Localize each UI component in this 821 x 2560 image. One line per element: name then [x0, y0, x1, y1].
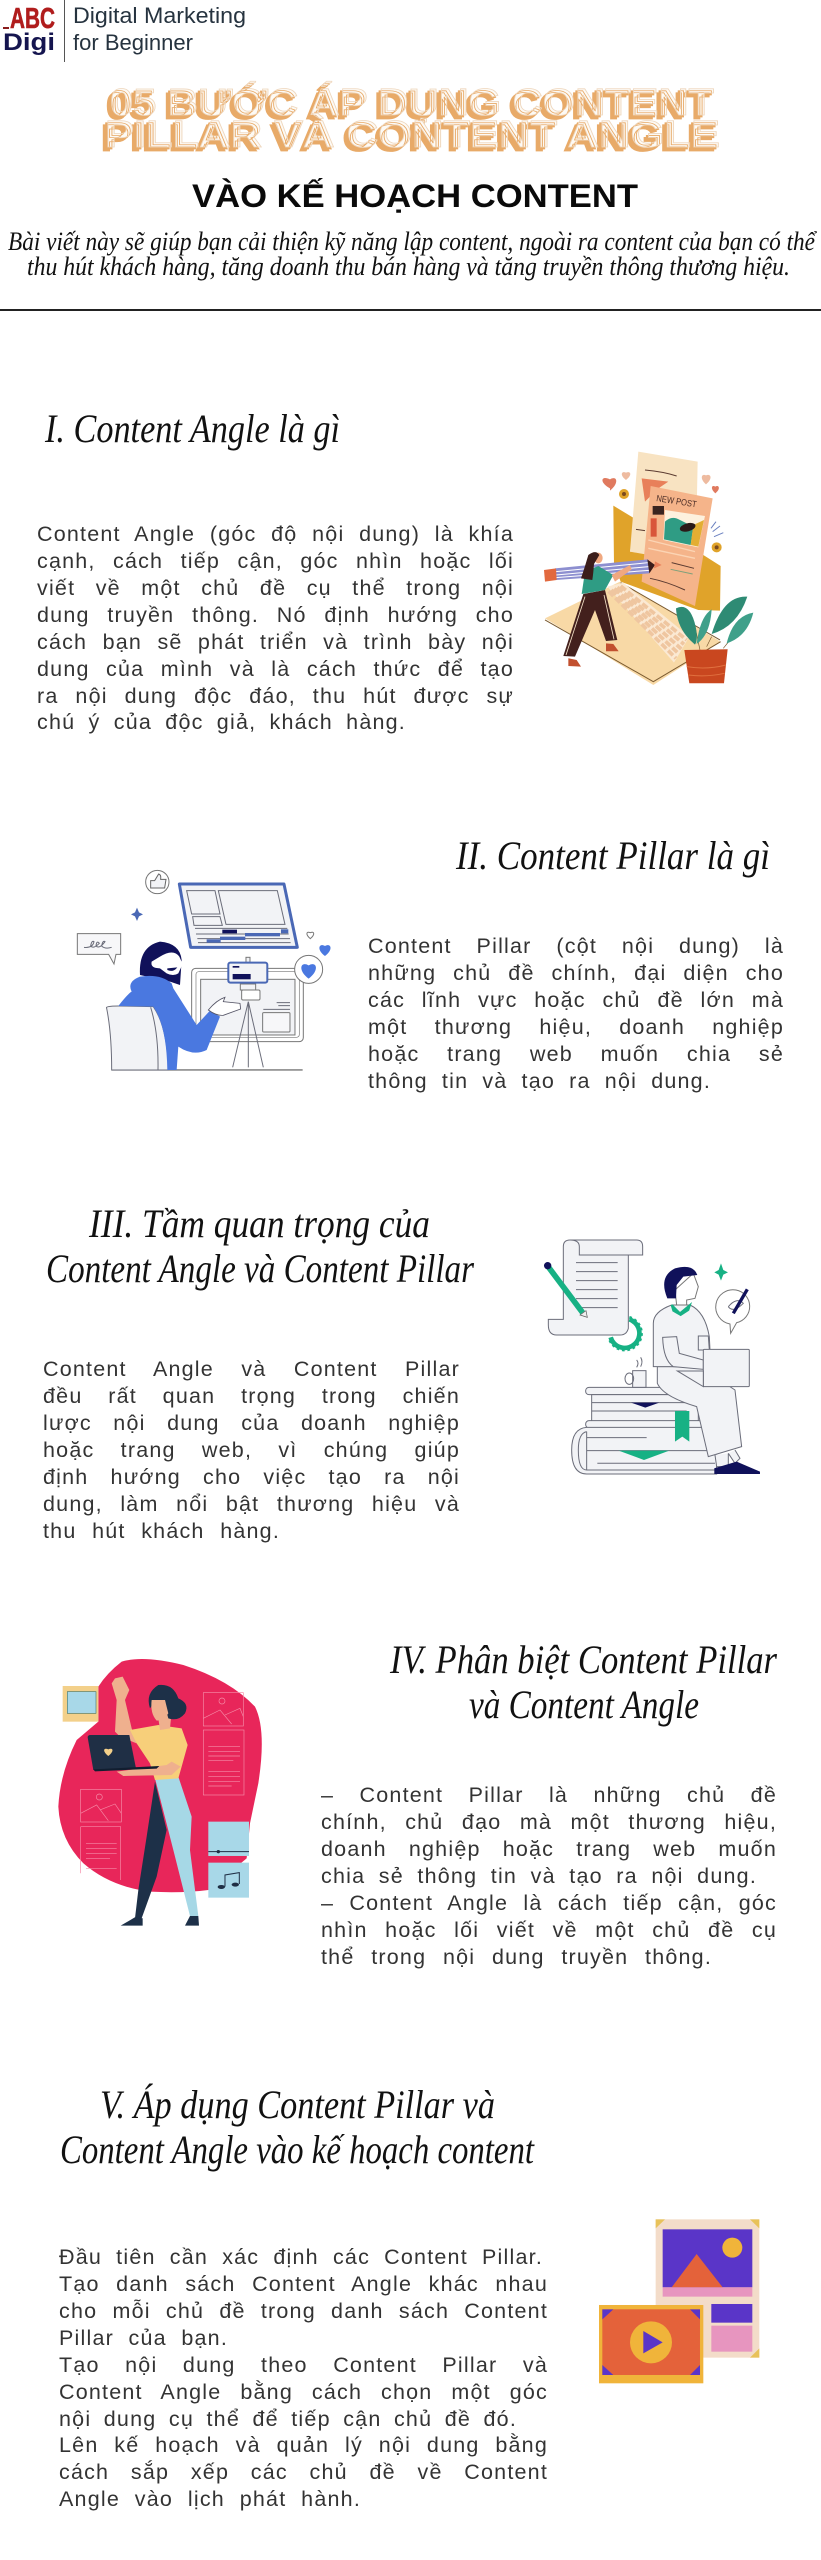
legs — [135, 1782, 167, 1918]
text block III: đều rất quan trọng trong chiến — [43, 1384, 460, 1408]
woman — [563, 590, 617, 657]
text block IV: – Content Pillar là những chủ đề — [321, 1783, 777, 1807]
text block V: cách sắp xếp các chủ đề về Content — [59, 2460, 548, 2484]
cup — [633, 1371, 646, 1387]
woman — [657, 1367, 742, 1457]
text block I: ra nội dung độc đáo, thu hút được sự — [37, 684, 514, 708]
books — [586, 1387, 699, 1395]
heading V: V. Áp dụng Content Pillar và — [100, 2082, 495, 2127]
text block III: hoặc trang web, vì chúng giúp — [43, 1438, 460, 1462]
tripod and phone — [233, 1002, 263, 1067]
text block V: Content Angle bằng cách chọn một góc — [59, 2380, 548, 2404]
text block V — [59, 2245, 548, 2511]
torso — [112, 1677, 137, 1743]
desk monitor — [192, 968, 303, 1042]
text block III: thu hút khách hàng. — [43, 1519, 280, 1543]
text block IV — [321, 1783, 777, 1969]
main title — [105, 80, 720, 156]
intro text — [8, 227, 817, 281]
laptop — [703, 1349, 749, 1387]
illustration: woman on books — [544, 1240, 760, 1474]
text block V: nội dung cụ thể để tiếp cận chủ đề đó. — [59, 2407, 517, 2431]
text block II — [368, 934, 784, 1093]
plant — [695, 627, 730, 650]
new post label: NEW POST — [656, 493, 698, 509]
text block III — [43, 1357, 460, 1543]
heading II: II. Content Pillar là gì — [455, 833, 770, 878]
text block II: một thương hiệu, doanh nghiệp — [368, 1015, 784, 1039]
text block IV: thể trong nội dung truyền thông. — [321, 1945, 712, 1969]
heading V: Content Angle vào kế hoạch content — [60, 2127, 535, 2172]
panel: section II — [76, 833, 784, 1093]
logo: Digital Marketing — [73, 3, 246, 28]
header: title area — [0, 0, 821, 311]
text block II: Content Pillar (cột nội dung) là — [368, 934, 784, 958]
text block IV: nhìn hoặc lối viết về một chủ đề cụ — [321, 1918, 777, 1942]
heading I: I. Content Angle là gì — [44, 406, 340, 451]
text block II: thông tin và tạo ra nội dung. — [368, 1069, 711, 1093]
heading III: III. Tầm quan trọng của — [88, 1201, 430, 1246]
logo — [3, 0, 246, 62]
pencil — [555, 559, 649, 580]
text block III: Content Angle và Content Pillar — [43, 1357, 460, 1381]
text block V: Tạo nội dung theo Content Pillar và — [59, 2353, 548, 2377]
person — [106, 1006, 168, 1070]
text block IV: chính, chủ đạo mà một thương hiệu, — [321, 1810, 777, 1834]
text block V: cho mỗi chủ đề trong danh sách Content — [59, 2299, 548, 2323]
text block I: dung truyền thông. Nó định hướng cho — [37, 603, 514, 627]
laptop — [88, 1735, 136, 1770]
text block V: Tạo danh sách Content Angle khác nhau — [59, 2272, 548, 2296]
text block I: cạnh, cách tiếp cận, góc nhìn hoặc lối — [37, 549, 514, 573]
text block III: dung, làm nổi bật thương hiệu và — [43, 1492, 460, 1516]
text block V: Pillar của bạn. — [59, 2326, 228, 2350]
text block I: dung của mình và là cách thức để tạo — [37, 657, 514, 681]
text block II: những chủ đề chính, đại diện cho — [368, 961, 784, 985]
text block III: định hướng cho việc tạo ra nội — [43, 1465, 460, 1489]
panel: section I — [37, 406, 754, 734]
text block II: các lĩnh vực hoặc chủ đề lớn mà — [368, 988, 784, 1012]
logo: ABC — [10, 3, 55, 35]
text block IV: chia sẻ thông tin và tạo ra nội dung. — [321, 1864, 757, 1888]
text block IV: doanh nghiệp hoặc trang web muốn — [321, 1837, 777, 1861]
panel: section III — [43, 1201, 760, 1543]
panel: section V — [59, 2082, 760, 2511]
text block II: hoặc trang web muốn chia sẻ — [368, 1042, 784, 1066]
logo: Digi — [3, 29, 55, 56]
illustration: video creator — [77, 870, 331, 1070]
text block V: Lên kế hoạch và quản lý nội dung bằng — [59, 2433, 548, 2457]
main title: PILLAR VÀ CONTENT ANGLE — [105, 112, 720, 156]
text block V: Angle vào lịch phát hành. — [59, 2487, 361, 2511]
text block I: Content Angle (góc độ nội dung) là khía — [37, 522, 514, 546]
heading III — [46, 1201, 474, 1291]
panel: section IV — [58, 1637, 778, 1969]
illustration: woman with laptop — [58, 1659, 262, 1926]
heading V — [60, 2082, 535, 2172]
text block V: Đầu tiên cần xác định các Content Pillar. — [59, 2245, 543, 2269]
illustration: media cards — [599, 2219, 759, 2383]
heading IV — [389, 1637, 777, 1727]
text block I: viết về một chủ đề cụ thể trong nội — [37, 576, 514, 600]
heading IV: và Content Angle — [469, 1682, 699, 1727]
subtitle: VÀO KẾ HOẠCH CONTENT — [192, 178, 638, 214]
text block IV: – Content Angle là cách tiếp cận, góc — [321, 1891, 777, 1915]
text block I: chú ý của độc giả, khách hàng. — [37, 710, 406, 734]
text block I — [37, 522, 514, 734]
text block III: lược nội dung của doanh nghiệp — [43, 1411, 460, 1435]
logo: for Beginner — [73, 30, 193, 55]
illustration: laptop new post — [544, 452, 753, 685]
heading III: Content Angle và Content Pillar — [46, 1246, 474, 1291]
text block I: cách bạn sẽ phát triển và trình bày nội — [37, 630, 514, 654]
main title: 05 BƯỚC ÁP DỤNG CONTENT — [110, 80, 714, 124]
